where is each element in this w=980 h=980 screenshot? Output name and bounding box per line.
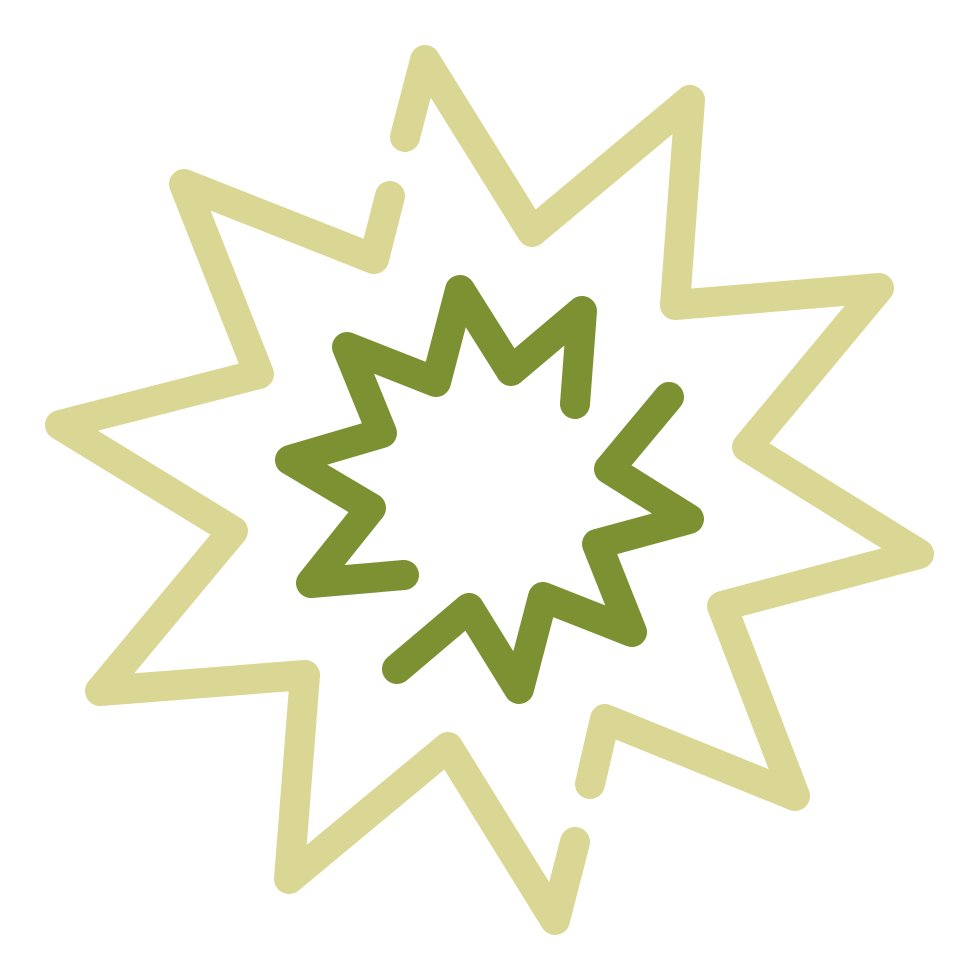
- inner starburst outline: [290, 290, 689, 689]
- outer starburst outline: [60, 60, 919, 920]
